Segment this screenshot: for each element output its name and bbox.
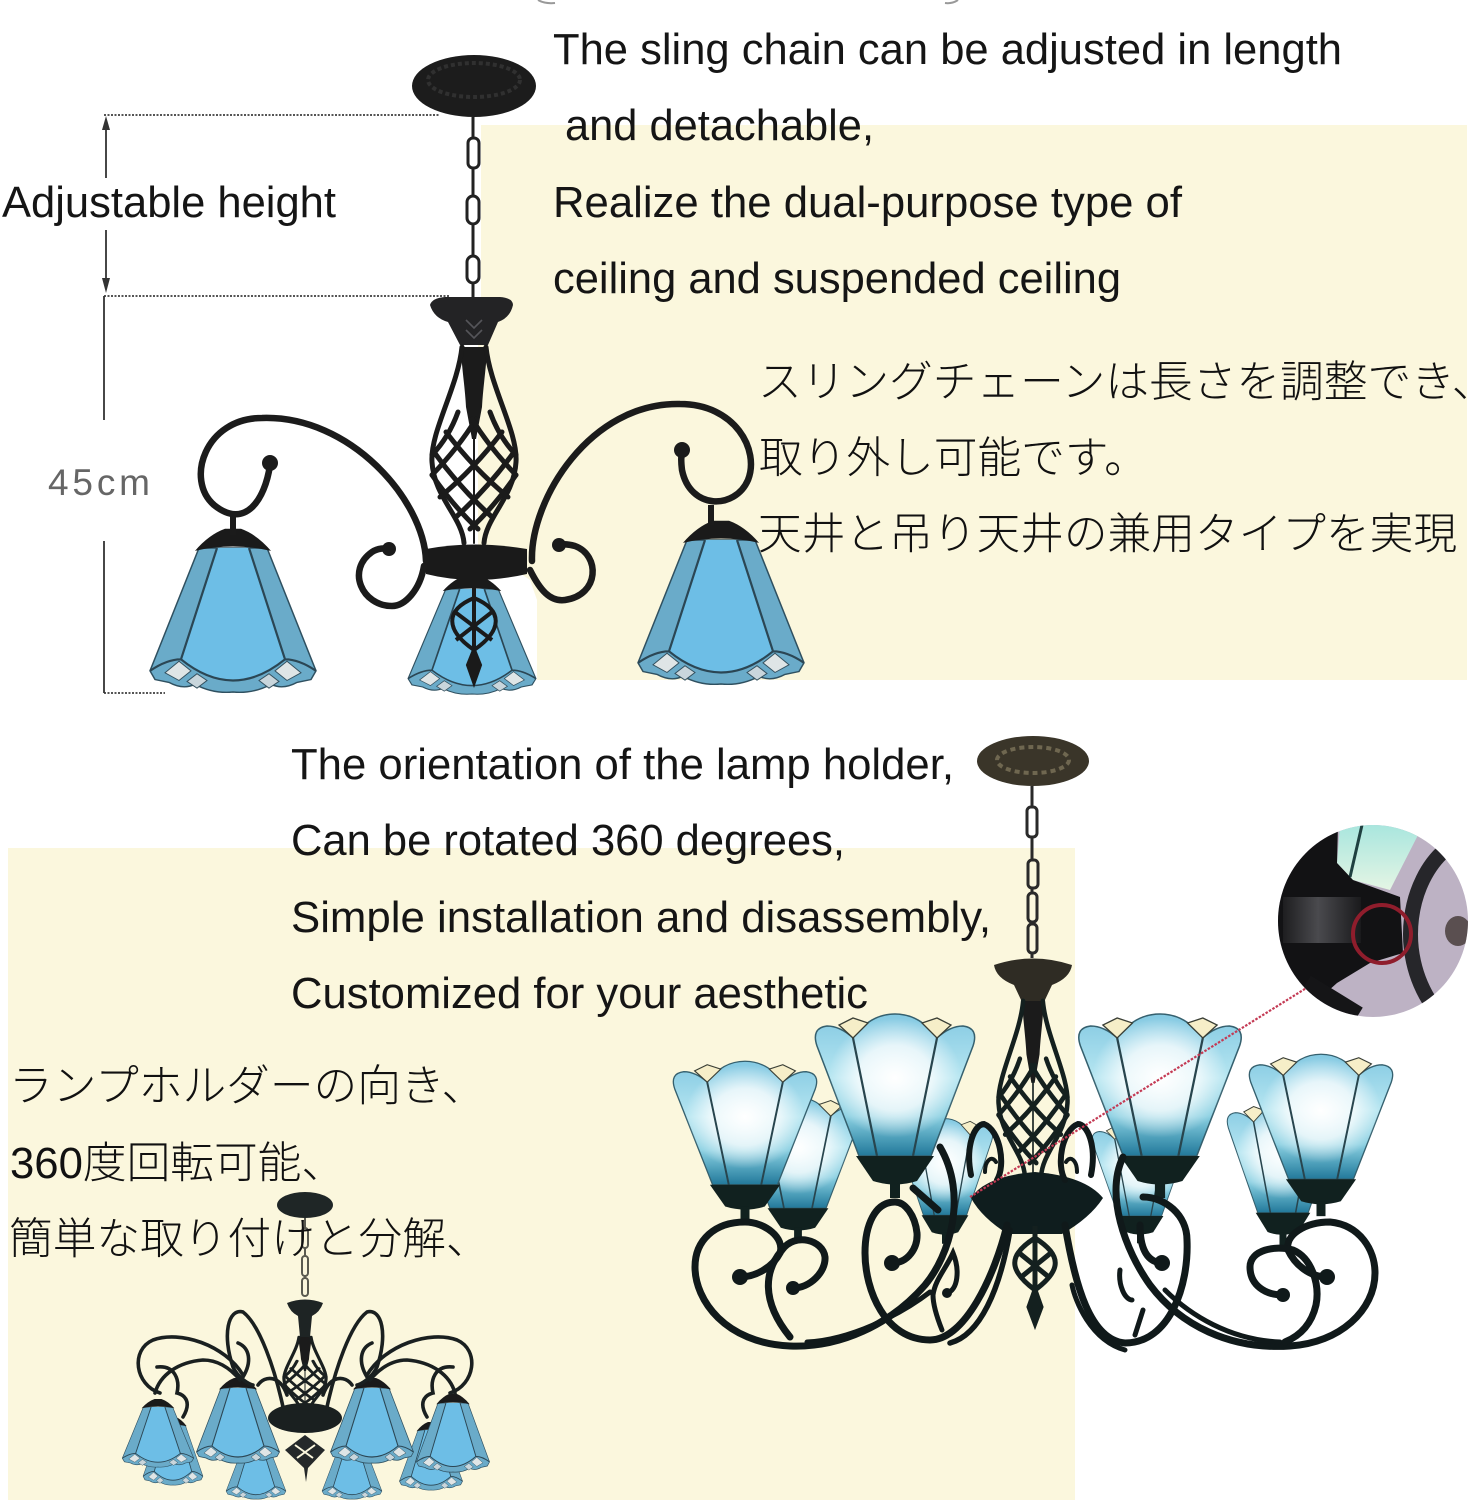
back shades	[143, 1417, 463, 1499]
lattice cage	[998, 1001, 1068, 1175]
dimension label: 45cm	[48, 462, 150, 503]
text block: lamp holder English: The orientation of the lamp holder,	[291, 740, 954, 789]
arms	[201, 404, 751, 606]
text block: lamp holder Japanese: 簡単な取り付けと分解、	[9, 1215, 490, 1264]
text block: sling chain English: Realize the dual-purpose type of	[553, 178, 1183, 227]
body cup	[287, 1300, 323, 1337]
back shades	[736, 1097, 1339, 1245]
inset shade line	[1350, 825, 1362, 877]
chain	[302, 1218, 308, 1296]
lower finial	[285, 1435, 325, 1482]
three-arm chandelier	[150, 55, 804, 694]
cropped lamp fragment at top edge	[538, 0, 958, 3]
height label: Adjustable height	[2, 178, 336, 227]
text block: lamp holder Japanese: ランプホルダーの向き、	[9, 1062, 485, 1111]
inset shade	[1337, 825, 1420, 890]
inset knob	[1445, 916, 1468, 946]
body cup	[994, 958, 1072, 1002]
canopy	[277, 1192, 333, 1218]
text block: sling chain Japanese: 取り外し可能です。	[759, 434, 1148, 483]
lower finial	[1015, 1226, 1055, 1323]
right shade	[638, 521, 804, 684]
inset background	[1278, 825, 1468, 1017]
text block: sling chain English: and detachable,	[565, 101, 874, 150]
text block: sling chain English	[553, 25, 1342, 303]
hub	[971, 1172, 1103, 1234]
text block: lamp holder English	[291, 740, 991, 1018]
lattice cage	[432, 347, 516, 543]
text block: lamp holder English: Can be rotated 360 degrees,	[291, 816, 845, 865]
arm drops	[233, 505, 711, 535]
arm finials	[262, 442, 690, 556]
small seven-arm chandelier	[122, 1192, 490, 1499]
text block: sling chain Japanese	[758, 358, 1473, 559]
outer shades	[673, 1054, 1393, 1221]
right arms	[1061, 1124, 1375, 1350]
text block: lamp holder English: Customized for your aesthetic	[291, 969, 868, 1018]
panel: cream backdrop top	[478, 125, 1467, 680]
chain	[467, 117, 479, 300]
canopy	[412, 55, 536, 117]
text block: sling chain English: The sling chain can be adjusted in length	[553, 25, 1342, 74]
canopy	[977, 736, 1089, 786]
hub	[268, 1403, 342, 1433]
hub	[426, 544, 527, 580]
text block: lamp holder Japanese: 360度回転可能、	[10, 1139, 345, 1188]
text block: sling chain English: ceiling and suspended ceiling	[553, 254, 1121, 303]
inset hub	[1278, 832, 1403, 1000]
lattice cage	[284, 1337, 326, 1410]
inset arm ring	[1411, 850, 1445, 1005]
front shades	[122, 1378, 490, 1472]
inset band	[1283, 897, 1361, 943]
five-arm large chandelier	[673, 736, 1393, 1350]
center shade	[408, 575, 536, 694]
left arms	[138, 1312, 287, 1417]
callout leader line	[970, 987, 1308, 1197]
inset lower arm	[1305, 985, 1357, 1017]
arm finials	[732, 1255, 1335, 1302]
front shades	[815, 1014, 1241, 1198]
left shade	[150, 529, 316, 692]
text block: lamp holder Japanese	[9, 1062, 490, 1264]
canopy relief	[997, 747, 1069, 773]
left arms	[695, 1124, 1010, 1346]
right arms	[323, 1312, 472, 1417]
lower finial	[452, 585, 496, 682]
text block: sling chain Japanese: 天井と吊り天井の兼用タイプを実現	[758, 510, 1457, 559]
text block: lamp holder English: Simple installation and disassembly,	[291, 893, 991, 942]
chain	[1027, 786, 1038, 958]
body cup	[430, 297, 513, 345]
panel: cream backdrop bottom	[8, 848, 1075, 1500]
detail inset: lamp holder close-up	[1278, 825, 1471, 1017]
inset red marker	[1353, 905, 1411, 963]
dimension lines	[102, 115, 450, 693]
